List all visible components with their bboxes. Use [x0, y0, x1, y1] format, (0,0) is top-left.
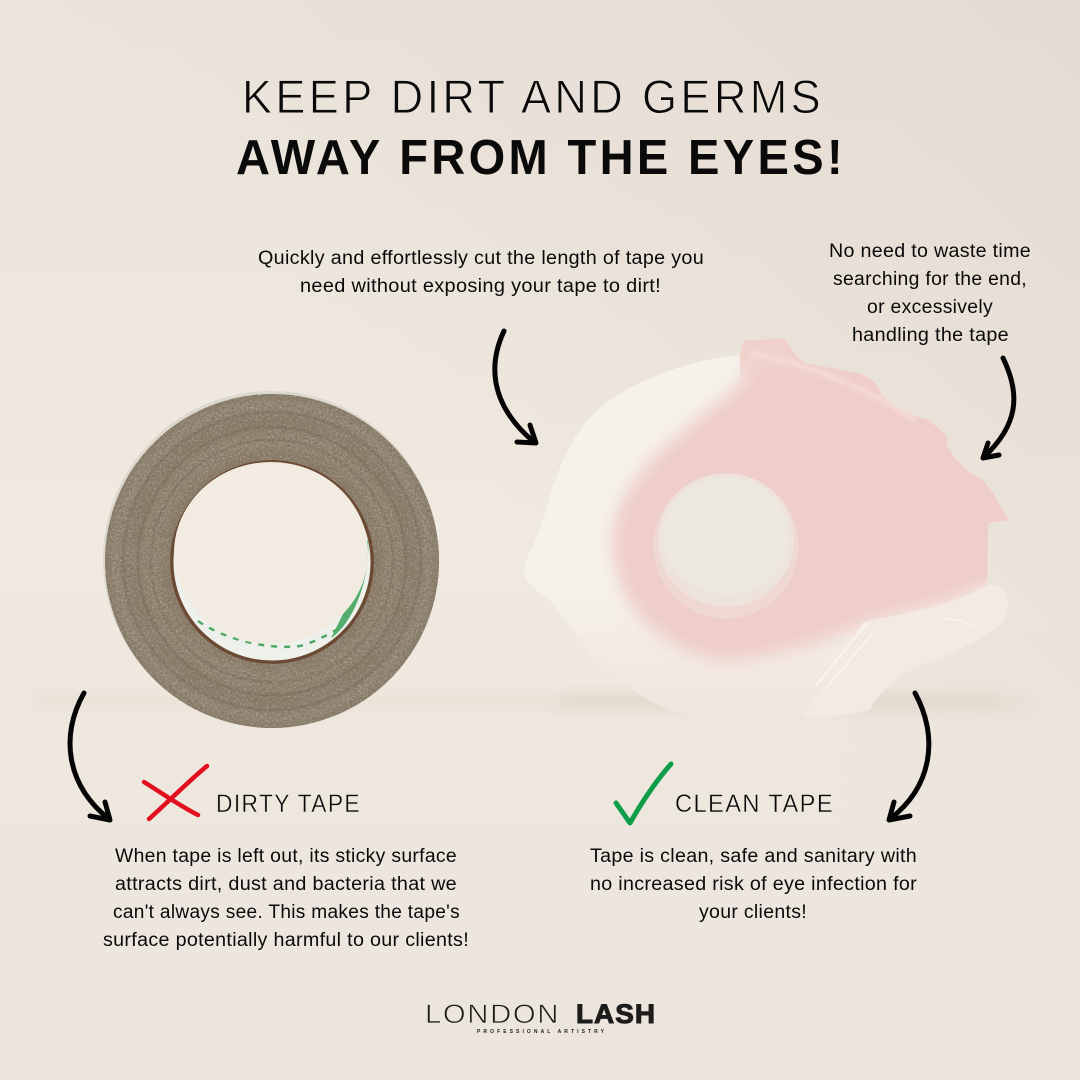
title: [236, 70, 846, 185]
dispenser centre hole: [653, 473, 799, 619]
text: clean tape description: Tape is clean, safe and sanitary with: [590, 846, 917, 867]
text: cut the length of tape: need without exposing your tape to dirt!: [300, 276, 661, 297]
icon: green check: [616, 764, 671, 823]
pink tape body: [607, 338, 1009, 664]
text: cut the length of tape: Quickly and effortlessly cut the length of tape you: [258, 248, 704, 269]
logo: London Lash: LONDON: [425, 999, 560, 1029]
arrow: to dispenser cutter: [495, 331, 536, 443]
text: cut the length of tape: [258, 248, 704, 297]
roll hole with inner core: [170, 460, 374, 664]
dirty tape roll photo: [103, 391, 439, 728]
logo: London Lash: PROFESSIONAL ARTISTRY: [477, 1029, 605, 1035]
clean tape dispenser photo: [524, 338, 1009, 716]
logo: London Lash: LASH: [576, 999, 656, 1029]
icon: red cross: [144, 766, 207, 819]
text: no need to waste time: handling the tape: [852, 325, 1009, 346]
text: no need to waste time: or excessively: [867, 297, 993, 318]
text: clean tape description: your clients!: [699, 902, 807, 923]
title: AWAY FROM THE EYES!: [236, 131, 846, 185]
arrow: to tape end: [983, 358, 1014, 458]
text: no need to waste time: searching for the end,: [833, 269, 1027, 290]
text: clean tape description: no increased risk of eye infection for: [590, 874, 917, 895]
arrow: to clean tape label: [889, 693, 929, 820]
heading: dirty tape: DIRTY TAPE: [216, 790, 361, 818]
floor shadows: [30, 692, 1030, 714]
text: dirty tape description: can't always see. This makes the tape's: [113, 902, 460, 923]
text: clean tape description: [590, 846, 917, 923]
text: no need to waste time: No need to waste time: [829, 241, 1031, 262]
clear cutter arm: [858, 586, 999, 630]
heading: clean tape: CLEAN TAPE: [675, 790, 834, 818]
text: dirty tape description: When tape is left out, its sticky surface: [115, 846, 457, 867]
logo: London Lash: [425, 999, 656, 1035]
text: dirty tape description: surface potentially harmful to our clients!: [103, 930, 469, 951]
text: no need to waste time: [829, 241, 1031, 346]
text: dirty tape description: [103, 846, 469, 951]
text: dirty tape description: attracts dirt, dust and bacteria that we: [115, 874, 457, 895]
title: KEEP DIRT AND GERMS: [242, 70, 824, 123]
arrow: to dirty tape label: [70, 693, 110, 820]
